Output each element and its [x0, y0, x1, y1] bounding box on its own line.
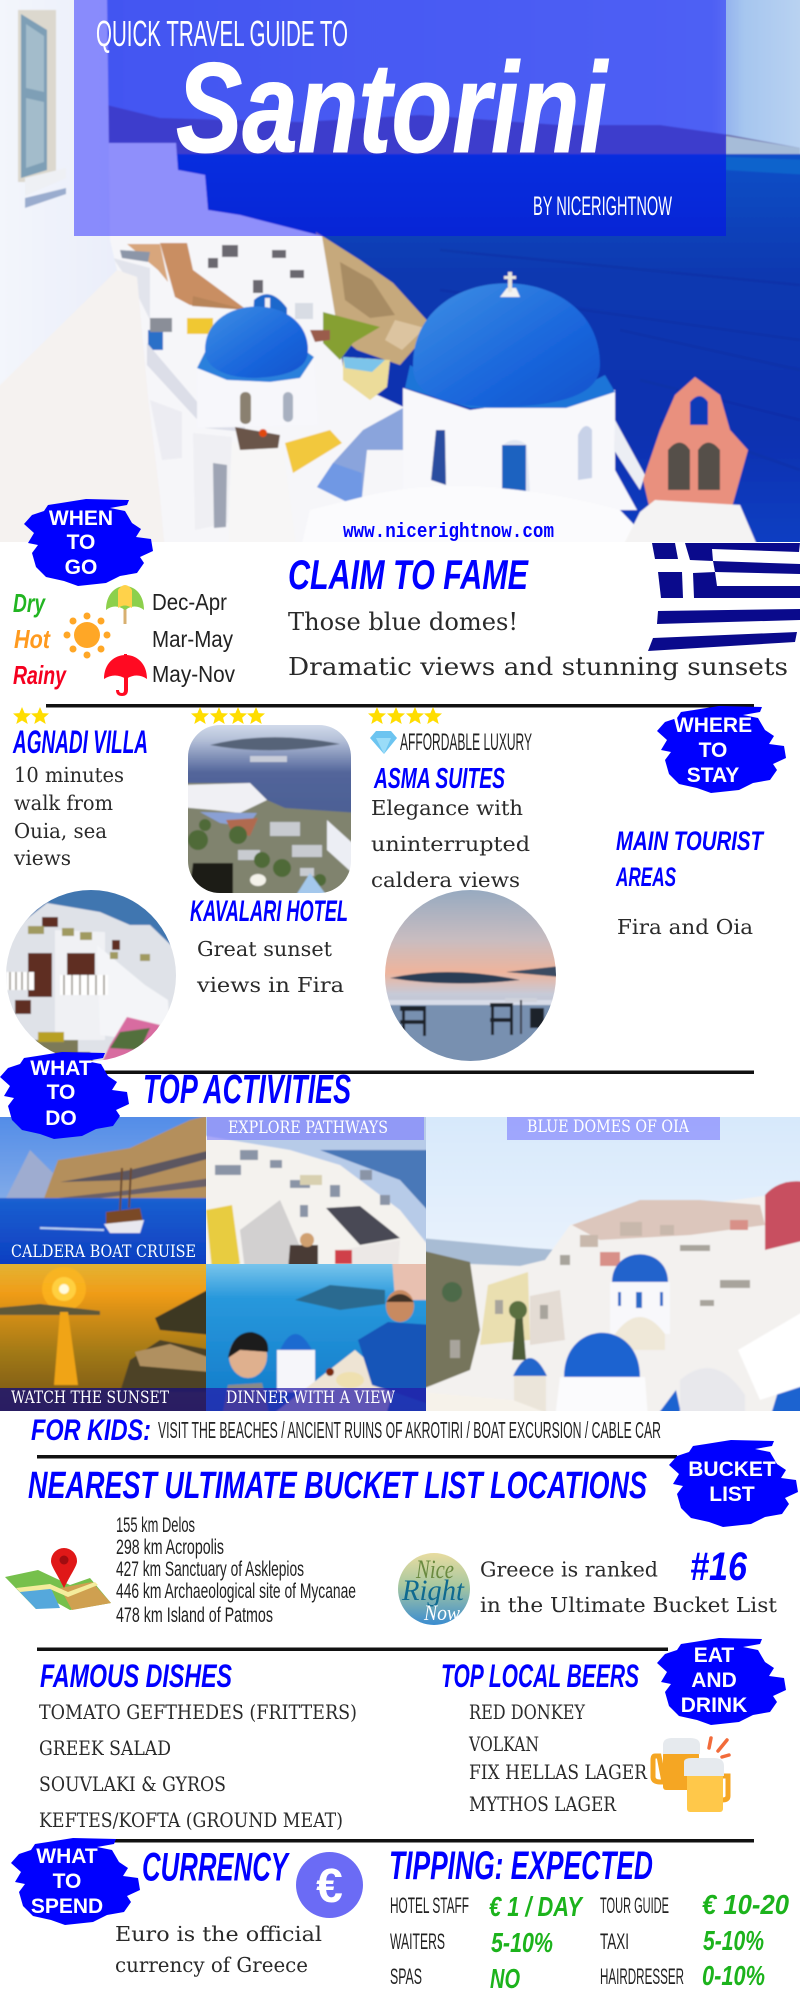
list: beers: FIX HELLAS LAGER [469, 1761, 648, 1784]
flag of Greece [648, 543, 800, 651]
heading: tipping: TIPPING: EXPECTED [389, 1844, 653, 1888]
stars: kavalari [191, 707, 265, 724]
heading: claim to fame: CLAIM TO FAME [288, 551, 529, 598]
text: asma description: Elegance with [371, 796, 523, 820]
weather: dry [13, 585, 144, 624]
badge: eat and drink: DRINK [681, 1694, 747, 1717]
months: Mar-May [152, 626, 233, 652]
photo: agnadi villa [6, 890, 176, 1061]
logo: nice right now: Nice [415, 1555, 454, 1584]
heading: asma suites: ASMA SUITES [373, 763, 505, 795]
table: tipping [390, 1889, 789, 1994]
weather: rainy [13, 654, 147, 696]
text: ranking [480, 1558, 778, 1617]
badge: where to stay: TO [699, 739, 727, 762]
text: agnadi description: 10 minutes [14, 763, 124, 787]
text: asma description: uninterrupted [371, 832, 530, 856]
badge: where to stay [657, 706, 786, 793]
heading: famous dishes: FAMOUS DISHES [40, 1658, 232, 1694]
text: main tourist areas: Fira and Oia [617, 915, 753, 939]
website url: www.nicerightnow.com [343, 521, 554, 544]
stars: asma [368, 707, 442, 724]
tan cliff [316, 232, 433, 365]
table: tipping: 5-10% [703, 1925, 764, 1956]
list: dishes: KEFTES/KOFTA (GROUND MEAT) [39, 1809, 343, 1832]
badge: eat and drink [657, 1638, 786, 1725]
table: tipping: WAITERS [390, 1929, 445, 1954]
list: nearest distances: 155 km Delos [116, 1514, 195, 1537]
icon: red umbrella [104, 654, 147, 696]
icon: green umbrella [106, 585, 144, 624]
list: beers [468, 1701, 648, 1816]
badge: eat and drink: EAT [694, 1644, 734, 1667]
chimney [228, 442, 297, 552]
months: May-Nov [152, 661, 235, 687]
band: dinner with a view: DINNER WITH A VIEW [226, 1388, 395, 1408]
badge: what to spend: WHAT [36, 1845, 98, 1868]
yellow roof [285, 430, 342, 473]
small church [196, 402, 246, 428]
heading: main tourist areas: AREAS [615, 862, 676, 892]
text: asma description: caldera views [371, 868, 520, 892]
photo: watch the sunset [0, 1264, 206, 1411]
weather: rainy: Rainy [13, 660, 67, 690]
band: watch the sunset: WATCH THE SUNSET [11, 1388, 170, 1408]
weather: hot: Hot [14, 624, 51, 654]
band: blue domes of Oia: BLUE DOMES OF OIA [527, 1117, 690, 1137]
badge: when to go: GO [65, 556, 97, 579]
icon: euro coin: € [316, 1860, 343, 1913]
text: ranking: Greece is ranked [480, 1558, 658, 1582]
badge: what to do: DO [45, 1107, 77, 1130]
icon: sun [64, 612, 110, 658]
heading: currency: CURRENCY [142, 1846, 290, 1890]
kicker: quick travel guide: QUICK TRAVEL GUIDE TO [96, 13, 348, 54]
text: agnadi description: Ouia, sea [14, 819, 107, 843]
heading: for kids: FOR KIDS: [31, 1414, 151, 1447]
text: kavalari description: Great sunset [197, 937, 333, 961]
village [108, 143, 410, 560]
list: dishes: TOMATO GEFTHEDES (FRITTERS) [39, 1701, 357, 1724]
table: tipping: 0-10% [702, 1960, 765, 1991]
badge: what to spend [11, 1838, 140, 1925]
photo: explore pathways [206, 1117, 426, 1264]
badge: bucket list: LIST [709, 1483, 755, 1506]
list: dishes [39, 1701, 357, 1832]
list: beers: MYTHOS LAGER [469, 1793, 617, 1816]
label: affordable luxury: AFFORDABLE LUXURY [400, 729, 532, 756]
text: currency description [115, 1922, 322, 1977]
text: agnadi description: walk from [14, 791, 113, 815]
logo: nice right now: Now [423, 1600, 460, 1625]
photo: kavalari hotel view [188, 725, 351, 893]
hero photo: Santorini blue domes [0, 0, 800, 560]
band: explore pathways: EXPLORE PATHWAYS [228, 1118, 388, 1138]
list: beers: VOLKAN [468, 1733, 539, 1756]
badge: eat and drink: AND [691, 1669, 737, 1692]
icon: map pin [5, 1548, 111, 1610]
hero title panel [74, 0, 726, 236]
text: agnadi description [13, 763, 124, 870]
logo: nice right now: Right [401, 1574, 465, 1607]
list: nearest distances: 427 km Sanctuary of Asklepios [116, 1558, 304, 1581]
heading: agnadi villa: AGNADI VILLA [12, 724, 148, 760]
byline: BY NICERIGHTNOW [533, 191, 672, 221]
badge: bucket list: BUCKET [688, 1458, 776, 1481]
badge: what to do: TO [47, 1081, 75, 1104]
list: dishes: SOUVLAKI & GYROS [39, 1773, 226, 1796]
badge: where to stay: STAY [687, 764, 739, 787]
text: currency description: currency of Greece [115, 1953, 308, 1977]
weather: dry: Dry [13, 588, 46, 618]
text: asma description [371, 796, 530, 892]
text: currency description: Euro is the official [115, 1922, 322, 1946]
title: Santorini: Santorini [176, 37, 609, 180]
table: tipping: TAXI [600, 1929, 629, 1954]
table: tipping: HOTEL STAFF [390, 1893, 469, 1918]
photo: dinner with a view [206, 1264, 426, 1411]
label: caldera boat cruise: CALDERA BOAT CRUISE [11, 1242, 196, 1262]
left wall [0, 0, 116, 386]
list: nearest distances: 478 km Island of Patmos [116, 1604, 273, 1627]
text: agnadi description: views [13, 846, 71, 870]
stairs [147, 343, 245, 432]
badge: when to go: TO [67, 531, 95, 554]
badge: what to spend: TO [53, 1870, 81, 1893]
logo: nice right now [398, 1553, 470, 1625]
photo: blue domes of Oia [420, 1110, 800, 1418]
icon: diamond [370, 731, 397, 754]
shadow dome [332, 408, 404, 496]
text: claim to fame 1: Those blue domes! [288, 608, 518, 636]
icon: beer mugs [653, 1738, 729, 1812]
rank number: #16 [690, 1545, 748, 1589]
months: Dec-Apr [152, 589, 227, 615]
icon: euro coin [296, 1852, 363, 1918]
badge: bucket list [669, 1440, 798, 1527]
months [152, 589, 235, 687]
big church [403, 388, 637, 510]
table: tipping: € 10-20 [702, 1889, 789, 1920]
badge: what to do: WHAT [30, 1057, 92, 1080]
table: tipping: TOUR GUIDE [600, 1893, 669, 1918]
text: ranking: in the Ultimate Bucket List [480, 1593, 778, 1617]
table: tipping: € 1 / DAY [489, 1891, 584, 1922]
text: claim to fame 2: Dramatic views and stunning sunsets [288, 653, 788, 681]
text: kavalari description: views in Fira [196, 973, 344, 997]
heading: top activities: TOP ACTIVITIES [143, 1066, 351, 1112]
weather: hot [14, 612, 110, 658]
table: tipping: HAIRDRESSER [600, 1964, 684, 1989]
text: kavalari description [196, 937, 344, 997]
badge: what to do [0, 1052, 129, 1139]
badge: where to stay: WHERE [674, 714, 752, 737]
stars: agnadi [13, 707, 49, 724]
badge: what to spend: SPEND [31, 1895, 103, 1918]
heading: kavalari hotel: KAVALARI HOTEL [190, 895, 348, 928]
bell tower [643, 377, 748, 514]
list: nearest distances: 298 km Acropolis [116, 1536, 224, 1559]
list: nearest distances: 446 km Archaeological site of Mycanae [116, 1580, 356, 1603]
list: beers: RED DONKEY [469, 1701, 586, 1724]
badge: when to go [24, 499, 153, 586]
list: dishes: GREEK SALAD [39, 1737, 171, 1760]
list: nearest distances [116, 1514, 356, 1627]
heading: top local beers: TOP LOCAL BEERS [441, 1658, 639, 1694]
badge: when to go: WHEN [49, 507, 113, 530]
table: tipping: 5-10% [491, 1927, 553, 1958]
photo: asma suites sunset terrace [385, 890, 556, 1061]
heading: main tourist areas [615, 826, 765, 892]
table: tipping: SPAS [390, 1964, 422, 1989]
table: tipping: NO [490, 1963, 520, 1994]
photo: caldera boat cruise [0, 1117, 206, 1264]
